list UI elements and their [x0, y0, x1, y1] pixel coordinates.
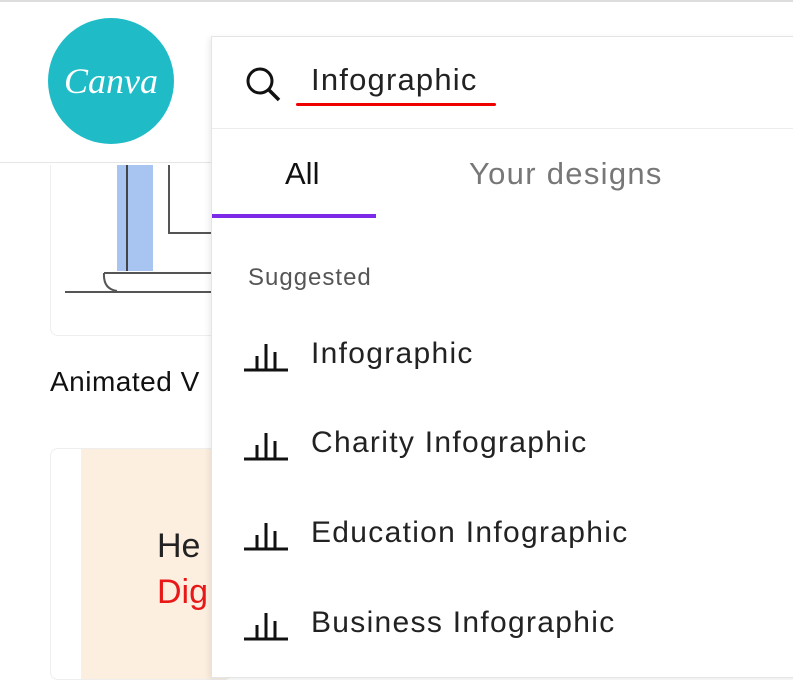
- card: template preview: [50, 448, 232, 680]
- heading: Animated: Animated V: [50, 366, 200, 397]
- red underline: [296, 103, 496, 106]
- logo: Canva circle: Canva: [64, 61, 158, 101]
- suggestion: Infographic: Infographic: [311, 337, 474, 370]
- logo: Canva circle: [48, 18, 174, 144]
- active tab indicator: [212, 214, 376, 218]
- label: Suggested: Suggested: [248, 264, 372, 291]
- suggestion: Infographic: [244, 337, 474, 372]
- icon: search: [246, 68, 280, 102]
- suggestion: Education Infographic: Education Infographic: [311, 516, 628, 549]
- top header bar: [0, 0, 793, 163]
- card: template preview: He: [157, 527, 200, 565]
- suggestion: Charity Infographic: Charity Infographic: [311, 426, 588, 459]
- tab: All: All: [285, 156, 319, 191]
- dropdown panel: [211, 36, 793, 678]
- card: template preview: Dig: [157, 573, 208, 611]
- card: illustration: [50, 165, 232, 336]
- suggestion: Business Infographic: Business Infographic: [311, 606, 616, 639]
- search text: Infographic: [311, 62, 478, 97]
- tab: Your designs: Your designs: [469, 156, 663, 191]
